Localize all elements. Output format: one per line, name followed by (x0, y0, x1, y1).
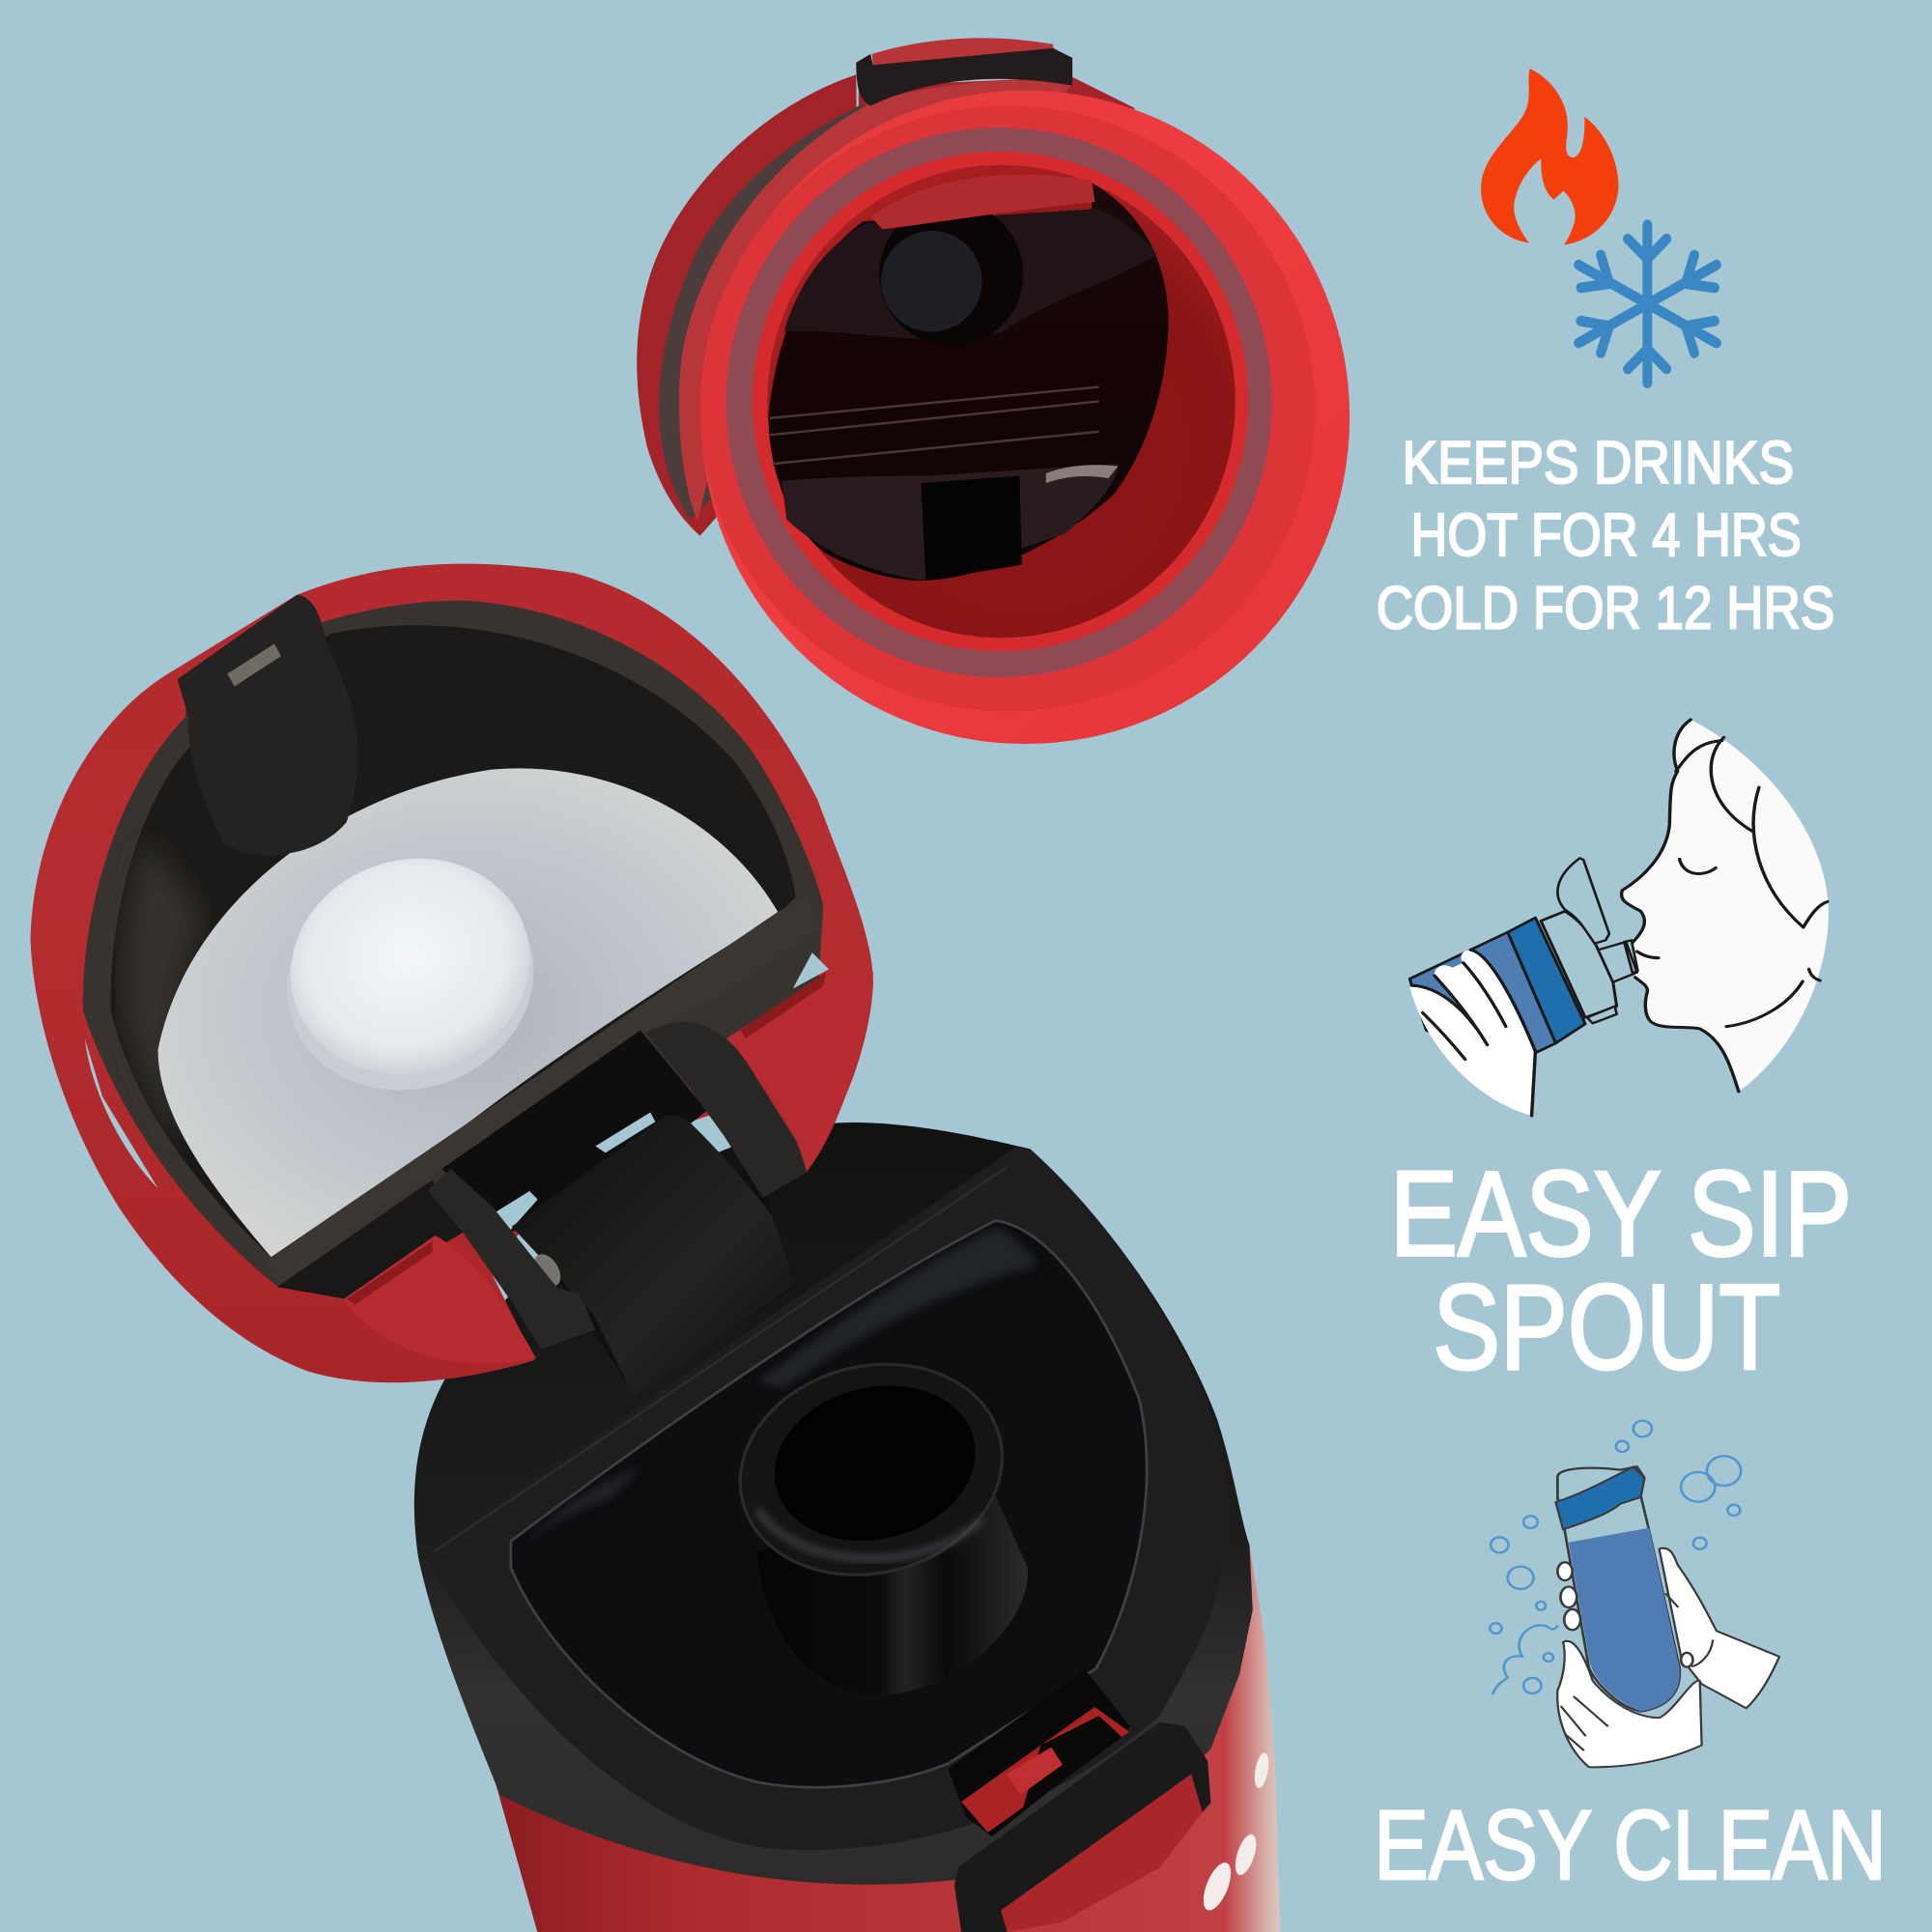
spout rim (718, 1337, 1025, 1602)
spout: SPOUT (1433, 1261, 1780, 1395)
icon: person drinking (1409, 720, 1829, 1116)
button side (258, 839, 562, 1122)
spout rim gloss (757, 1509, 982, 1558)
hinge cylinder (512, 1116, 795, 1397)
blue lid band (1555, 1466, 1644, 1529)
black square port (921, 476, 1022, 581)
slot left (347, 1241, 433, 1305)
red tip right (726, 972, 873, 1172)
hand lines (1561, 1594, 1713, 1750)
easy sip: EASY SIP (1390, 1148, 1852, 1282)
photo: open lid (31, 564, 873, 1397)
red bottle body (487, 1546, 1280, 1932)
inner rail (781, 464, 1118, 581)
bottle mid band (1409, 932, 1555, 1053)
hand (1409, 950, 1535, 1116)
spout opening (758, 1365, 992, 1561)
back top strip (859, 77, 1135, 212)
black clip in lid (178, 595, 358, 855)
heading: easy sip spout (1390, 1148, 1852, 1395)
latch pin (1007, 1747, 1063, 1795)
cap rim (423, 1147, 1227, 1850)
red outer shell (31, 564, 873, 1382)
bubbles (1490, 1421, 1741, 1693)
black clip (954, 1722, 1210, 1932)
valve hole (879, 202, 1023, 346)
finger lines (1411, 950, 1535, 1116)
left hand (1557, 1641, 1702, 1767)
photo: bottle top with spout (414, 1122, 1280, 1932)
thread ring (700, 106, 1315, 711)
line 2: HOT FOR 4 HRS (1410, 501, 1802, 569)
hinge arm left (428, 1169, 595, 1350)
red slider tab (1001, 1775, 1203, 1932)
spout barrel (757, 1472, 1028, 1695)
photo: inverted top lid (637, 38, 1350, 744)
lid interior (111, 625, 796, 1261)
ridge lines (770, 387, 1099, 464)
latch red (961, 1707, 1129, 1833)
inner red ring (753, 152, 1248, 651)
clip notch (227, 643, 281, 687)
fingertips (1557, 1562, 1692, 1667)
text: keeps drinks (1377, 429, 1834, 642)
lower dark body (277, 1179, 463, 1299)
bottle outline (1557, 1466, 1680, 1712)
top red slider (872, 38, 1053, 65)
back red rim (637, 74, 859, 536)
line 3: COLD FOR 12 HRS (1377, 575, 1834, 642)
spout (1598, 940, 1637, 982)
black clip (856, 48, 1072, 106)
hinge arm right (646, 1022, 809, 1198)
slot right (740, 972, 826, 1038)
hinge gap 2 (496, 1191, 538, 1230)
icon: snowflake (1578, 225, 1717, 384)
window highlight (525, 1229, 1038, 1547)
button top (263, 828, 558, 1105)
latch slot (948, 1670, 1130, 1836)
latch shadow box (1022, 1716, 1122, 1811)
upper plate (784, 209, 1156, 339)
red tip left (344, 1236, 536, 1363)
flip lid (1557, 858, 1609, 944)
hinge gap 1 (595, 1112, 655, 1152)
gap left (85, 1038, 158, 1188)
bottle neck (1541, 911, 1617, 1017)
icon: flame (1481, 69, 1619, 244)
right hand (1660, 1548, 1779, 1708)
bottle dark band (1508, 918, 1585, 1043)
red band (679, 80, 1075, 522)
chord bar (266, 897, 820, 1288)
face outline (1622, 720, 1739, 1092)
glossy window (511, 1220, 1147, 1787)
ledge (1587, 1007, 1617, 1023)
hinge back (441, 1031, 707, 1233)
silicone disc (158, 768, 779, 1258)
body dots (1198, 1751, 1271, 1914)
blue body (1569, 1528, 1680, 1712)
face (1622, 720, 1829, 1092)
valve ball (881, 231, 982, 331)
interior left shade (123, 838, 202, 1150)
line 1: KEEPS DRINKS (1403, 429, 1794, 497)
red latch tab (870, 175, 1095, 229)
spring screw (528, 1249, 566, 1292)
interior (767, 165, 1236, 638)
black cap (414, 1122, 1253, 1885)
hair and features (1637, 737, 1828, 1027)
gap right (793, 952, 829, 988)
dark window (768, 183, 1169, 581)
main front ring (701, 91, 1350, 744)
ridge lines (434, 1168, 1007, 1551)
dark inner body (83, 601, 823, 1288)
gasket ring (725, 128, 1272, 677)
grey band (659, 103, 864, 519)
rail highlight (1046, 465, 1118, 483)
hinge recess (546, 1165, 794, 1395)
icon: washing bottle (1490, 1421, 1779, 1767)
